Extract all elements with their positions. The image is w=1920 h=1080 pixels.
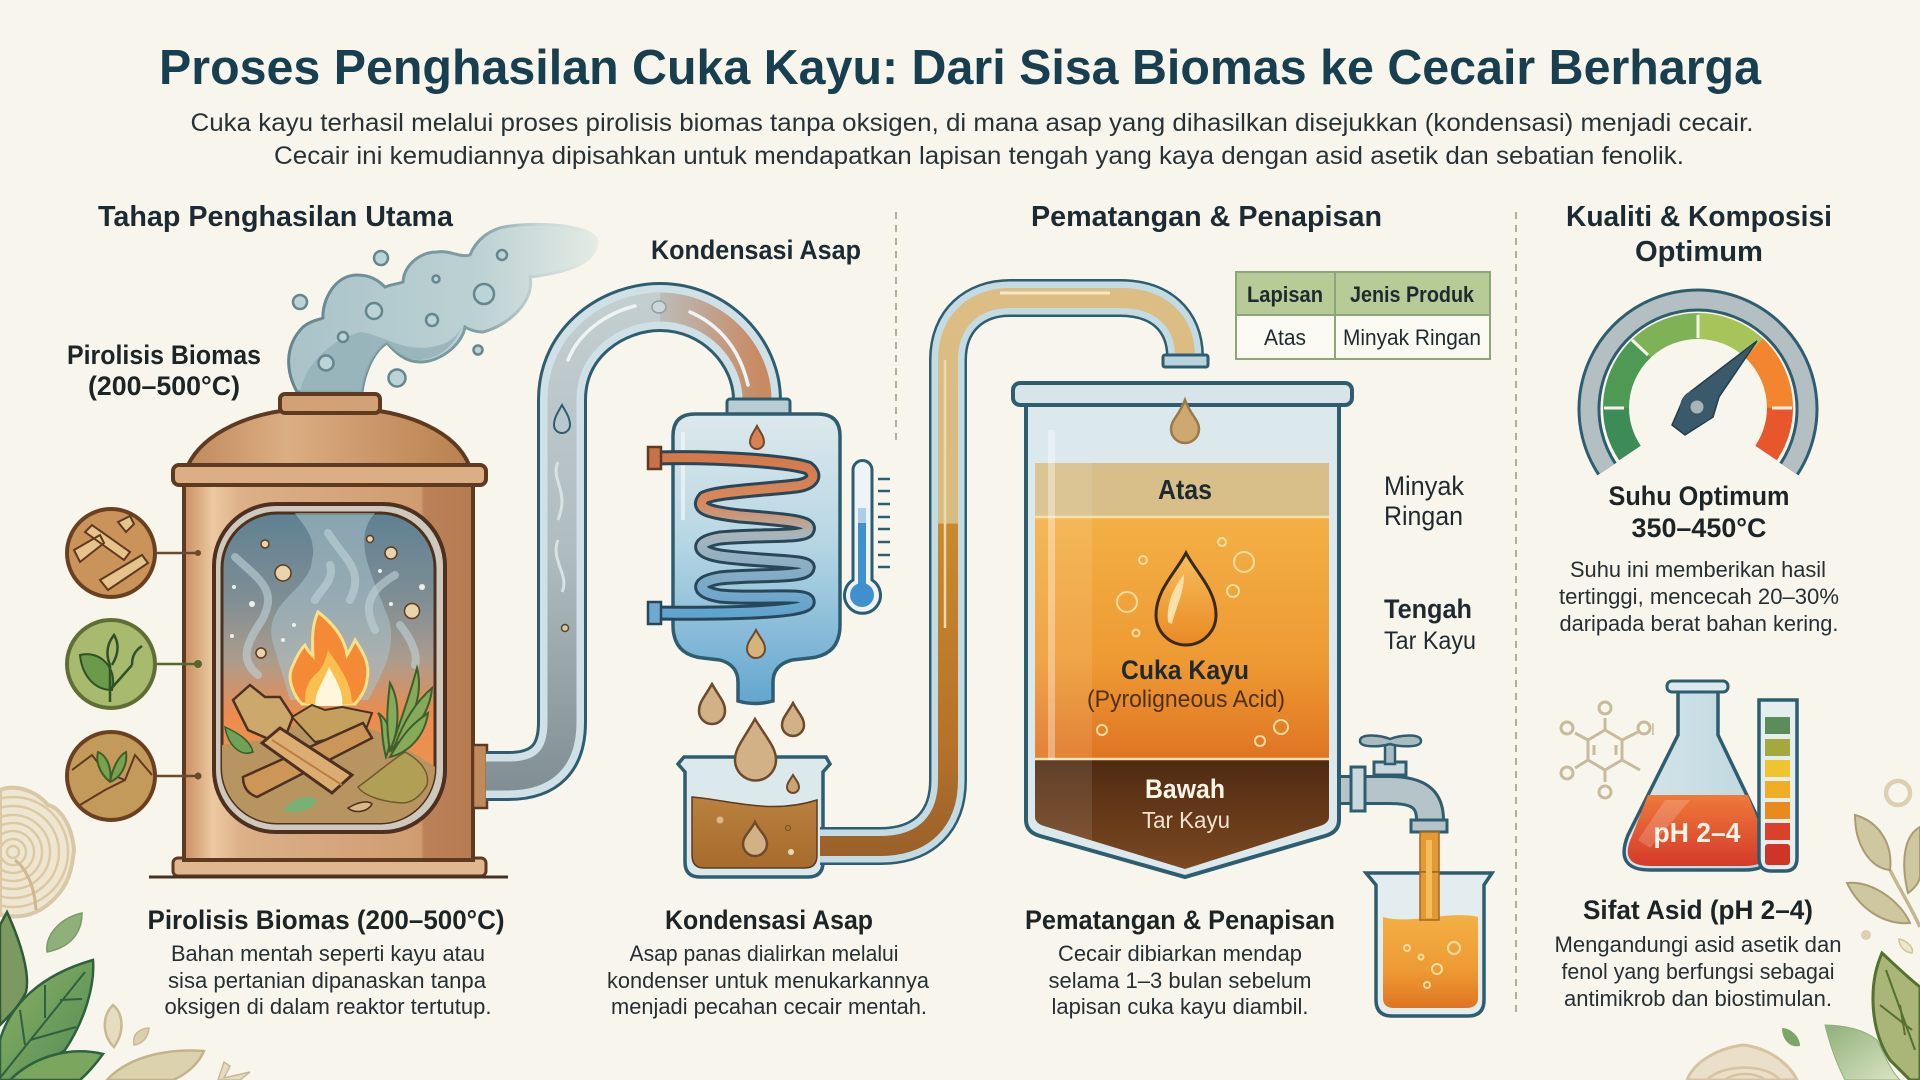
collection beaker [678, 757, 830, 877]
rising vapour [235, 513, 416, 700]
side label: Tengah Tar Kayu [1384, 594, 1476, 655]
reactor rim [173, 465, 486, 485]
plant [378, 668, 432, 757]
biomass chunk left [233, 685, 293, 745]
heading: Kualiti dan Komposisi Optimum: Kualiti & Komposisi [1566, 201, 1832, 233]
product table [1236, 272, 1490, 359]
caption: Pirolisis Biomas: Bahan mentah seperti kayu atau [171, 941, 485, 966]
flask caption: Sifat Asid (pH 2–4) [1583, 895, 1813, 925]
caption: Pirolisis Biomas: sisa pertanian dipanaskan tanpa [168, 968, 487, 993]
heading: Kualiti dan Komposisi Optimum: Optimum [1635, 236, 1763, 268]
reactor dome [188, 410, 469, 465]
gauge caption: 350–450°C [1632, 513, 1766, 543]
layer labels in tank: Tar Kayu [1142, 807, 1230, 833]
gauge caption: tertinggi, mencecah 20–30% [1559, 584, 1839, 609]
heading: Pematangan dan Penapisan: Pematangan & Penapisan [1031, 201, 1382, 233]
caption: Pematangan dan Penapisan [1025, 905, 1335, 1019]
debris [348, 802, 372, 811]
caption: Pirolisis Biomas: oksigen di dalam reaktor tertutup. [164, 994, 492, 1019]
gauge caption [1559, 481, 1839, 636]
pipe outlet [1163, 355, 1208, 367]
condenser vessel [673, 414, 840, 704]
bubbles [1097, 538, 1288, 746]
right mound [358, 752, 428, 803]
title: Proses Penghasilan Cuka Kayu: Dari Sisa Biomas ke Cecair Berharga [159, 41, 1762, 95]
label: Pirolisis Biomas: (200–500°C) [88, 371, 240, 401]
caption: Kondensasi Asap: kondenser untuk menukarkannya [607, 968, 930, 993]
condenser coil [655, 458, 813, 613]
heading: Tahap Penghasilan Utama: Tahap Penghasilan Utama [98, 201, 454, 233]
thermometer [845, 461, 890, 613]
product table: Minyak Ringan [1343, 325, 1481, 350]
layer labels in tank: Atas [1158, 474, 1212, 505]
side label: Minyak Ringan: Minyak [1384, 471, 1464, 501]
falling droplet [1171, 400, 1199, 443]
flask caption: fenol yang berfungsi sebagai [1562, 959, 1834, 984]
gauge metal arc [1589, 300, 1807, 469]
caption: Pematangan dan Penapisan: Cecair dibiarkan mendap [1058, 941, 1302, 966]
gauge caption: Suhu ini memberikan hasil [1570, 557, 1826, 582]
biomass inputs [67, 509, 202, 820]
decoration: leaves bottom left [0, 912, 250, 1080]
product table: Jenis Produk [1350, 282, 1475, 307]
divider lines [896, 212, 1516, 1018]
sparks [256, 536, 420, 658]
gauge coloured band [1616, 326, 1780, 453]
heading: Kondensasi Asap: Kondensasi Asap [651, 235, 861, 265]
pH test tube [1759, 700, 1797, 871]
gauge caption: Suhu Optimum [1608, 481, 1790, 511]
smoke cloud [289, 224, 597, 392]
pipe: beaker to tank [820, 293, 1185, 846]
caption: Kondensasi Asap [607, 905, 930, 1019]
label: Pirolisis Biomas: Pirolisis Biomas [67, 340, 261, 370]
layer: bottom [1035, 759, 1329, 871]
intro text: Cecair ini kemudiannya dipisahkan untuk mendapatkan lapisan tengah yang kaya dengan asid asetik dan sebatian fenolik. [274, 142, 1684, 170]
flame [290, 612, 368, 706]
reactor flange [473, 745, 487, 808]
condenser collar [727, 399, 790, 415]
reactor [149, 394, 508, 877]
condenser [648, 399, 840, 704]
large wood vinegar droplet [1156, 553, 1216, 645]
caption: Kondensasi Asap: menjadi pecahan cecair mentah. [611, 994, 927, 1019]
flask caption: antimikrob dan biostimulan. [1564, 986, 1832, 1011]
decoration: wood ring bottom left [0, 788, 74, 916]
layer: middle [1035, 517, 1329, 759]
front log [262, 728, 352, 793]
flask: pH 2–4 [1654, 817, 1741, 848]
label: Pirolisis Biomas [67, 340, 261, 401]
layer labels in tank: (Pyroligneous Acid) [1087, 686, 1285, 713]
tank rim [1013, 383, 1352, 405]
side label: Minyak Ringan: Ringan [1384, 501, 1463, 531]
caption: Pirolisis Biomas [148, 905, 504, 1019]
decoration: leaves and ring bottom right [1687, 781, 1920, 1080]
side label: Tengah Tar Kayu: Tengah [1384, 594, 1472, 624]
gauge caption: daripada berat bahan kering. [1560, 611, 1838, 636]
pipe highlights and vapour [568, 306, 748, 385]
biomass chunk centre [292, 705, 372, 742]
layer labels in tank: Cuka Kayu [1121, 655, 1249, 685]
reactor body [184, 482, 473, 860]
stream and receiving beaker [1366, 832, 1492, 1016]
ground [222, 724, 435, 823]
falling distillate droplets [699, 684, 804, 780]
icon: wood chips [67, 509, 201, 597]
caption: Pematangan dan Penapisan: Pematangan & Penapisan [1025, 905, 1335, 935]
reactor cap [280, 394, 380, 413]
intro text [190, 109, 1754, 170]
side label: Tengah Tar Kayu: Tar Kayu [1384, 627, 1476, 655]
reactor base [149, 858, 508, 877]
icon: leaves [67, 620, 202, 708]
caption: Kondensasi Asap: Kondensasi Asap [665, 905, 873, 935]
caption: Pirolisis Biomas: Pirolisis Biomas (200–500°C) [148, 905, 504, 935]
gauge needle [1672, 341, 1757, 435]
condenser droplets [750, 426, 764, 449]
molecule: l [1651, 720, 1655, 739]
molecule [1561, 702, 1655, 798]
flask [1624, 681, 1770, 870]
caption: Pematangan dan Penapisan: selama 1–3 bulan sebelum [1048, 968, 1312, 993]
reactor window [214, 504, 445, 832]
product table: Lapisan [1247, 282, 1323, 307]
tank glass [1026, 404, 1339, 877]
product table: Atas [1264, 325, 1306, 350]
icon: agricultural residue [67, 732, 202, 820]
heading: Kualiti dan Komposisi Optimum [1566, 201, 1832, 268]
back log [243, 723, 372, 797]
settling tank [1013, 383, 1352, 877]
layer labels in tank [1087, 474, 1285, 833]
caption: Pematangan dan Penapisan: lapisan cuka kayu diambil. [1052, 994, 1308, 1019]
flask caption: Mengandungi asid asetik dan [1554, 932, 1842, 957]
flask caption [1554, 895, 1842, 1011]
tap and spout [1338, 736, 1447, 832]
caption: Kondensasi Asap: Asap panas dialirkan melalui [630, 941, 898, 966]
layer: top [1035, 463, 1329, 517]
small leaves [225, 727, 253, 753]
gauge [1589, 300, 1807, 469]
layer labels in tank: Bawah [1145, 774, 1225, 804]
pipe: smoke to condenser [486, 301, 757, 776]
intro text: Cuka kayu terhasil melalui proses pirolisis biomas tanpa oksigen, di mana asap yang dihasilkan disejukkan (kondensasi) menjadi cecair. [190, 109, 1754, 137]
side label: Minyak Ringan [1384, 471, 1464, 531]
